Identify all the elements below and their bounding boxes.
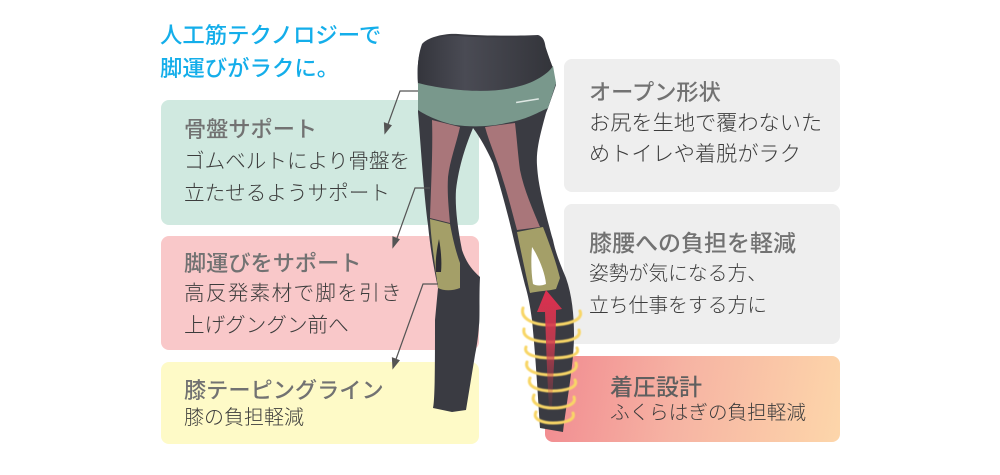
waist upper shading <box>418 36 553 91</box>
left knee taping <box>430 219 460 290</box>
heading: pelvis support: 骨盤サポート <box>184 117 317 142</box>
heading: knee and waist burden: 膝腰への負担を軽減 <box>589 230 796 256</box>
text: knee taping line: 膝の負担軽減 <box>184 407 304 429</box>
text: open shape <box>589 112 822 166</box>
arrow: to leg movement panel <box>393 188 430 247</box>
arrow: to pelvis panel <box>384 91 418 133</box>
compression rings <box>523 308 581 423</box>
title <box>160 23 381 81</box>
text: leg movement support: 上げグングン前へ <box>184 314 349 337</box>
right knee opening <box>531 247 546 286</box>
text: knee and waist burden: 立ち仕事をする方に <box>589 295 767 317</box>
arrow: to knee panel <box>392 284 438 368</box>
tights body <box>418 34 574 432</box>
right thigh panel <box>485 123 540 230</box>
heading: knee taping line: 膝テーピングライン <box>184 378 384 403</box>
panel: pelvis support <box>161 100 479 225</box>
text: pelvis support: ゴムベルトにより骨盤を <box>184 150 410 173</box>
panel: knee and waist burden <box>564 204 840 344</box>
panel: knee taping line <box>161 362 479 444</box>
text: compression design: ふくらはぎの負担軽減 <box>610 402 806 424</box>
panel: open shape <box>564 59 840 192</box>
logo mark <box>516 98 539 103</box>
text: knee and waist burden: 姿勢が気になる方、 <box>589 263 767 285</box>
pelvic rubber belt <box>418 66 556 126</box>
heading: leg movement support: 脚運びをサポート <box>184 251 362 276</box>
left thigh panel <box>430 120 460 223</box>
text: open shape: めトイレや着脱がラク <box>589 143 801 166</box>
text: pelvis support <box>184 150 410 205</box>
heading: open shape: オープン形状 <box>589 80 721 105</box>
title: 人工筋テクノロジーで <box>160 23 381 48</box>
text: knee and waist burden <box>589 263 767 317</box>
text: leg movement support <box>184 282 403 337</box>
heading: compression design: 着圧設計 <box>610 374 702 400</box>
title: 脚運びがラクに。 <box>160 56 339 81</box>
text: open shape: お尻を生地で覆わないた <box>589 112 822 135</box>
left knee opening <box>436 239 441 272</box>
panel: leg movement support <box>161 236 479 350</box>
upward red arrow <box>537 290 562 407</box>
text: pelvis support: 立たせるようサポート <box>184 182 390 205</box>
right knee taping <box>517 227 560 293</box>
text: leg movement support: 高反発素材で脚を引き <box>184 282 403 305</box>
panel: compression design <box>545 356 840 442</box>
